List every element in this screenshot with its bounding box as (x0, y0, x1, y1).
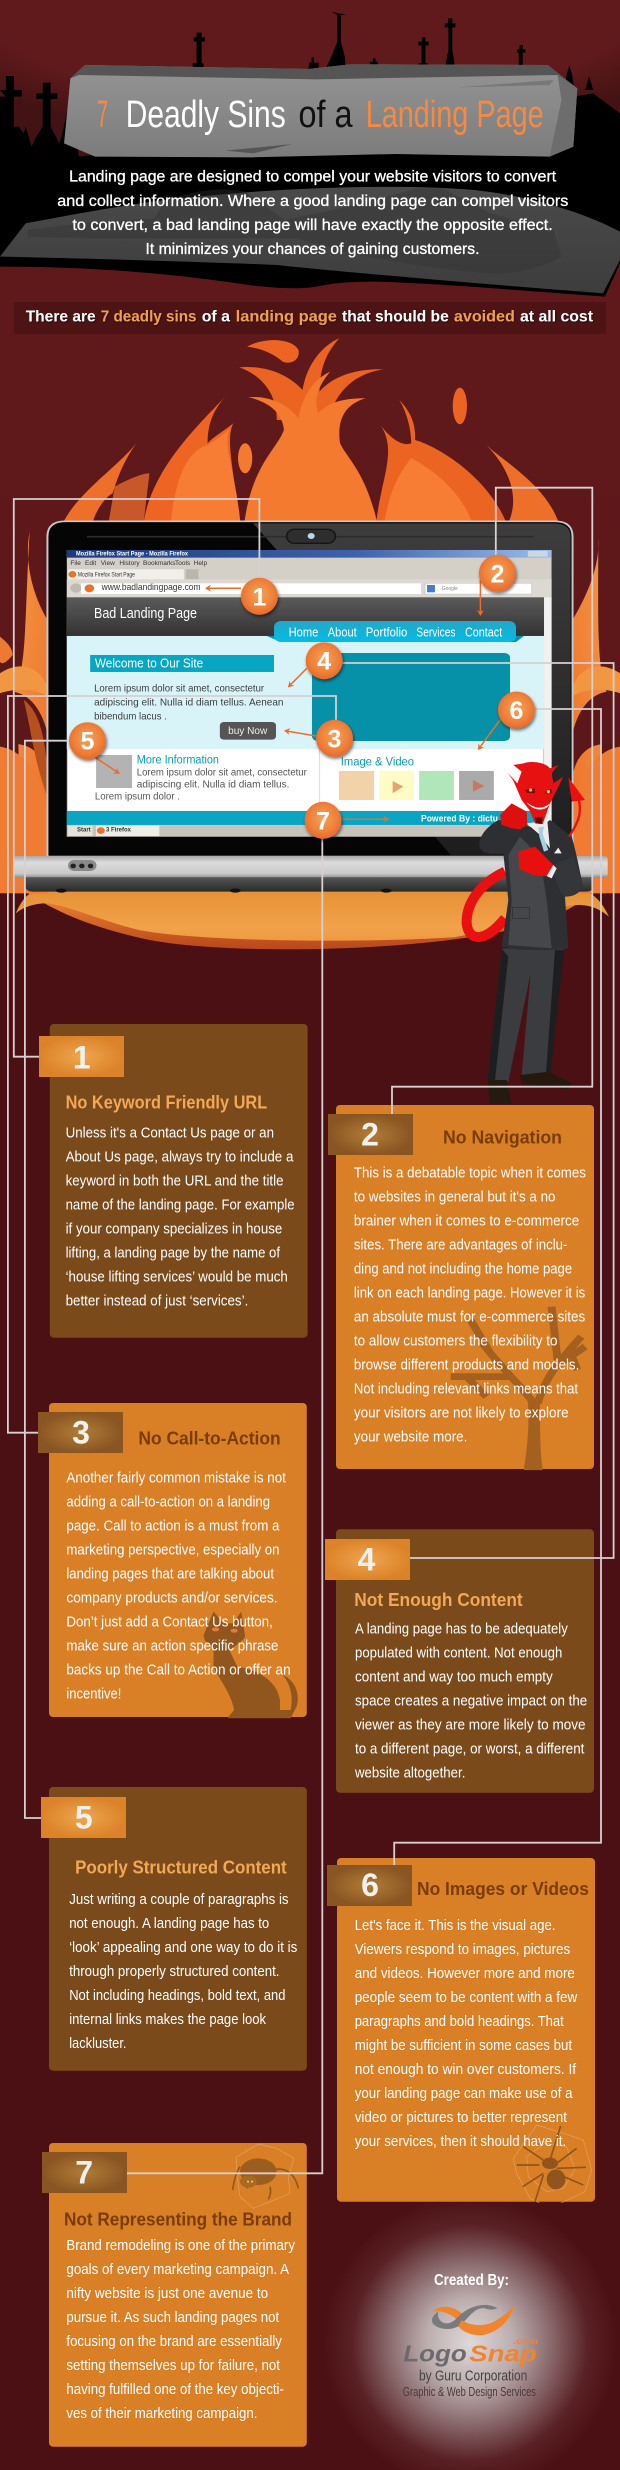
badge 3: 3 (328, 725, 341, 753)
tree watermark (451, 1307, 585, 1470)
badge 4 (306, 642, 343, 679)
card 2 body (354, 1165, 586, 1445)
warning banner: at all cost (520, 309, 594, 326)
card 1 body: if your company specializes in house (66, 1221, 282, 1237)
card 2 body: ding and not including the home page (354, 1261, 572, 1277)
card 4 body: content and way too much empty (355, 1669, 553, 1685)
card 5 (49, 1787, 307, 2071)
mock site text: adipiscing elit. Nulla id diam tellus. (137, 779, 289, 790)
mock site text: About (328, 625, 357, 640)
browser window (67, 550, 552, 837)
left side flames (0, 532, 47, 893)
card 6 body: might be sufficient in some cases but (355, 2038, 572, 2054)
browser chrome text: www.badlandingpage.com (101, 582, 201, 592)
card 1 body: lifting, a landing page by the name of (66, 1245, 281, 1261)
mock site text: Portfolio (366, 625, 407, 640)
title: Landing Page (366, 94, 544, 136)
card 1 heading: No Keyword Friendly URL (66, 1092, 267, 1112)
card 3 body: marketing perspective, especially on (66, 1542, 280, 1558)
number badges (69, 555, 535, 839)
badge 2 (479, 555, 516, 592)
card 3 body: landing pages that are talking about (66, 1566, 274, 1582)
intro paragraph (57, 169, 569, 258)
card 6 body: Let's face it. This is the visual age. (355, 1918, 556, 1934)
mock site text: Welcome to Our Site (95, 655, 203, 670)
card 6 body (355, 1918, 578, 2150)
intro paragraph: and collect information. Where a good landing page can compel visitors (57, 193, 569, 210)
card 7 body: ves of their marketing campaign. (66, 2406, 257, 2422)
card 7 body: goals of every marketing campaign. A (66, 2262, 289, 2278)
badge 1 (241, 578, 278, 615)
card 4 heading: Not Enough Content (354, 1590, 523, 1610)
card 2 body: to websites in general but it's a no (354, 1189, 556, 1205)
number tab 7: 7 (75, 2155, 93, 2191)
browser chrome text: Help (194, 560, 207, 567)
mock site text: More Information (137, 754, 219, 766)
top vignette (0, 0, 620, 200)
card 5 body (69, 1892, 297, 2052)
card 4 body (354, 1621, 587, 1781)
number tab 7 (42, 2152, 127, 2193)
card 5 body: internal links makes the page look (69, 2012, 267, 2028)
card 4 body: space creates a negative impact on the (355, 1693, 587, 1709)
card 1 (50, 1024, 308, 1338)
card 6 body: not enough to win over customers. If (355, 2062, 577, 2078)
card 1 body: name of the landing page. For example (66, 1197, 295, 1213)
badge 5: 5 (81, 728, 95, 756)
title: Deadly Sins (126, 94, 286, 136)
badge 5 (69, 722, 106, 759)
card 6 body: people seem to be content with a few (355, 1990, 578, 2006)
title: of a (298, 94, 353, 136)
number tab 5: 5 (75, 1799, 93, 1835)
mock site text: adipiscing elit. Nulla id diam tellus. Aenean (94, 696, 284, 708)
mock site text: Services (416, 625, 456, 640)
right side flames (573, 538, 620, 893)
card 7 (49, 2143, 307, 2447)
badge 7 (304, 802, 342, 839)
logo wordmark (403, 2336, 539, 2367)
card 1 body: Unless it's a Contact Us page or an (66, 1125, 274, 1141)
card 2 body: brainer when it comes to e-commerce (354, 1213, 579, 1229)
card 3 (49, 1403, 307, 1718)
arrows to problems (95, 580, 500, 819)
warning banner: landing page (236, 309, 337, 326)
card 7 body (66, 2238, 296, 2422)
browser chrome text: Start (77, 828, 91, 834)
intro paragraph: It minimizes your chances of gaining customers. (146, 241, 480, 258)
card 6 body: video or pictures to better represent (355, 2110, 567, 2126)
card 7 body: pursue it. As such landing pages not (66, 2310, 279, 2326)
card 2 body: your website more. (354, 1429, 467, 1445)
card 5 heading: Poorly Structured Content (75, 1857, 287, 1877)
devil raised tail tip (568, 777, 585, 837)
number tab 6: 6 (361, 1867, 379, 1903)
laptop (13, 521, 608, 893)
card 1 body: ‘house lifting services’ would be much (66, 1269, 288, 1285)
card 1 body: About Us page, always try to include a (66, 1149, 294, 1165)
card 5 body: Just writing a couple of paragraphs is (69, 1892, 289, 1908)
intro paragraph: to convert, a bad landing page will have exactly the opposite effect. (72, 217, 553, 234)
browser chrome text: Bookmarks (143, 560, 176, 567)
warning banner: 7 deadly sins (101, 309, 197, 326)
card 2 body: your visitors are not likely to explore (354, 1405, 569, 1421)
card 7 body: setting themselves up for failure, not (66, 2358, 280, 2374)
mock site text (94, 606, 503, 824)
spider watermark (233, 2144, 298, 2208)
card 3 heading: No Call-to-Action (138, 1428, 281, 1448)
title (97, 94, 544, 136)
card 6 body: and videos. However more and more (355, 1966, 575, 1982)
number tab 2: 2 (361, 1116, 379, 1152)
badge 2: 2 (490, 560, 504, 588)
card 1 body: better instead of just ‘services’. (66, 1293, 248, 1309)
card 2 body: link on each landing page. However it is (354, 1285, 585, 1301)
card 2 body: to allow customers the flexibility to (354, 1333, 558, 1349)
card 6 (337, 1858, 595, 2208)
warning banner (14, 302, 606, 334)
browser chrome text: View (101, 560, 115, 567)
card 2 body: an absolute must for e-commerce sites (354, 1309, 585, 1325)
mock site text: Lorem ipsum dolor sit amet, consectetur (94, 682, 265, 694)
warning banner: There are (26, 309, 96, 326)
flames (0, 338, 620, 949)
browser chrome text: 3 Firefox (106, 828, 132, 834)
card 3 body: adding a call-to-action on a landing (66, 1494, 270, 1510)
card 2 body: sites. There are advantages of inclu- (354, 1237, 568, 1253)
card 3 body: backs up the Call to Action or offer an (66, 1662, 291, 1678)
card 4 body: to a different page, or worst, a different (355, 1741, 584, 1757)
card 3 body (66, 1470, 291, 1702)
graveyard silhouette (0, 12, 620, 297)
laptop body (13, 521, 608, 893)
card 3 body: incentive! (66, 1686, 121, 1702)
card 3 body: company products and/or services. (66, 1590, 278, 1606)
mock site text: buy Now (228, 725, 268, 737)
number tab 5 (41, 1797, 126, 1838)
browser chrome text: Mozilla Firefox Start Page - Mozilla Firefox (76, 550, 188, 558)
title: 7 (97, 94, 108, 136)
card 1 body: keyword in both the URL and the title (66, 1173, 283, 1189)
number tab 1: 1 (73, 1039, 91, 1075)
warning banner: of a (202, 309, 230, 326)
devil hand on chest (518, 847, 557, 878)
badge 1: 1 (252, 583, 266, 611)
logo mark (432, 2305, 514, 2335)
card 2 body: This is a debatable topic when it comes (354, 1165, 586, 1181)
card 6 heading: No Images or Videos (417, 1879, 589, 1899)
devil suit (479, 820, 583, 1104)
mock site text: Contact (465, 625, 503, 640)
browser chrome text: Tools (175, 560, 191, 567)
credits glow (323, 2203, 620, 2470)
card 7 body: nifty website is just one avenue to (66, 2286, 268, 2302)
number tab 6 (327, 1865, 412, 1906)
devil head (500, 762, 563, 829)
intro paragraph: Landing page are designed to compel your website visitors to convert (69, 169, 557, 186)
card 5 body: ‘look’ appealing and one way to do it is (69, 1940, 297, 1956)
title stone (64, 64, 577, 157)
browser chrome text: Mozilla Firefox Start Page (78, 572, 135, 578)
number tab 3: 3 (72, 1414, 90, 1450)
devil pointing hand (500, 803, 527, 829)
card 7 heading: Not Representing the Brand (64, 2210, 292, 2230)
card 3 body: page. Call to action is a must from a (66, 1518, 280, 1534)
cat watermark (204, 1612, 298, 1718)
created by label: Created By: (434, 2272, 509, 2289)
card 3 body: Don’t just add a Contact Us button, (66, 1614, 273, 1630)
mock site text: Lorem ipsum dolor . (95, 791, 180, 802)
logo wordmark: Snap (469, 2341, 537, 2367)
mock site text: Powered By : dictu (421, 813, 498, 824)
mock site text: Bad Landing Page (94, 606, 197, 622)
number tab 3 (38, 1412, 123, 1453)
browser chrome text: Google (442, 586, 458, 592)
card 5 body: Not including headings, bold text, and (69, 1988, 286, 2004)
badge 6: 6 (509, 697, 523, 725)
card 7 body: focusing on the brand are essentially (66, 2334, 283, 2350)
card 2 (336, 1105, 594, 1470)
card 5 body: lackluster. (69, 2036, 126, 2052)
spider web watermark (513, 2125, 592, 2208)
card 4 body: populated with content. Not enough (355, 1645, 562, 1661)
badge 4: 4 (317, 648, 331, 676)
credits (323, 2203, 620, 2470)
number tab 4 (325, 1539, 410, 1580)
number tab 2 (328, 1114, 413, 1155)
devil character (467, 762, 585, 1104)
logo wordmark: Logo (403, 2341, 467, 2367)
badge 6 (498, 692, 535, 728)
browser chrome text (70, 550, 458, 834)
card 6 body: your services, then it should have it. (355, 2134, 566, 2150)
company line: by Guru Corporation (419, 2369, 527, 2385)
badge 3 (316, 720, 353, 757)
card 7 body: Brand remodeling is one of the primary (66, 2238, 296, 2254)
badge 7: 7 (316, 807, 330, 835)
browser chrome text: Edit (85, 560, 96, 567)
mock site text: bibendum lacus . (94, 710, 167, 722)
logo wordmark: .com (513, 2336, 539, 2346)
card 4 body: viewer as they are more likely to move (355, 1717, 586, 1733)
card 1 body (66, 1125, 295, 1309)
number tab 4: 4 (358, 1542, 376, 1578)
card 5 body: not enough. A landing page has to (69, 1916, 269, 1932)
card 2 heading: No Navigation (443, 1127, 562, 1147)
card 6 body: Viewers respond to images, pictures (355, 1942, 570, 1958)
devil tail (467, 872, 505, 937)
card 3 body: Another fairly common mistake is not (66, 1470, 286, 1486)
card 5 body: through properly structured content. (69, 1964, 280, 1980)
card 6 body: paragraphs and bold headings. That (355, 2014, 564, 2030)
card 4 body: A landing page has to be adequately (355, 1621, 568, 1637)
slab behind intro (0, 187, 620, 293)
warning banner: that should be (342, 309, 449, 326)
services line: Graphic & Web Design Services (403, 2385, 536, 2399)
mock site text: Lorem ipsum dolor sit amet, consectetur (137, 767, 307, 778)
card 4 (336, 1529, 594, 1793)
card 2 body: Not including relevant links means that (354, 1381, 578, 1397)
browser chrome text: History (119, 560, 140, 567)
card 4 body: website altogether. (354, 1765, 465, 1781)
mock site text: Home (289, 625, 318, 640)
card 6 body: your landing page can make use of a (355, 2086, 573, 2102)
browser chrome text: File (70, 560, 81, 567)
card 2 body: browse different products and models. (354, 1357, 579, 1373)
card 7 body: having fulfilled one of the key objecti- (66, 2382, 284, 2398)
connector lines (8, 488, 614, 2173)
number tab 1 (39, 1036, 124, 1077)
card 3 body: make sure an action specific phrase (66, 1638, 278, 1654)
warning banner: avoided (454, 309, 515, 326)
mock site text: Image & Video (341, 756, 414, 768)
